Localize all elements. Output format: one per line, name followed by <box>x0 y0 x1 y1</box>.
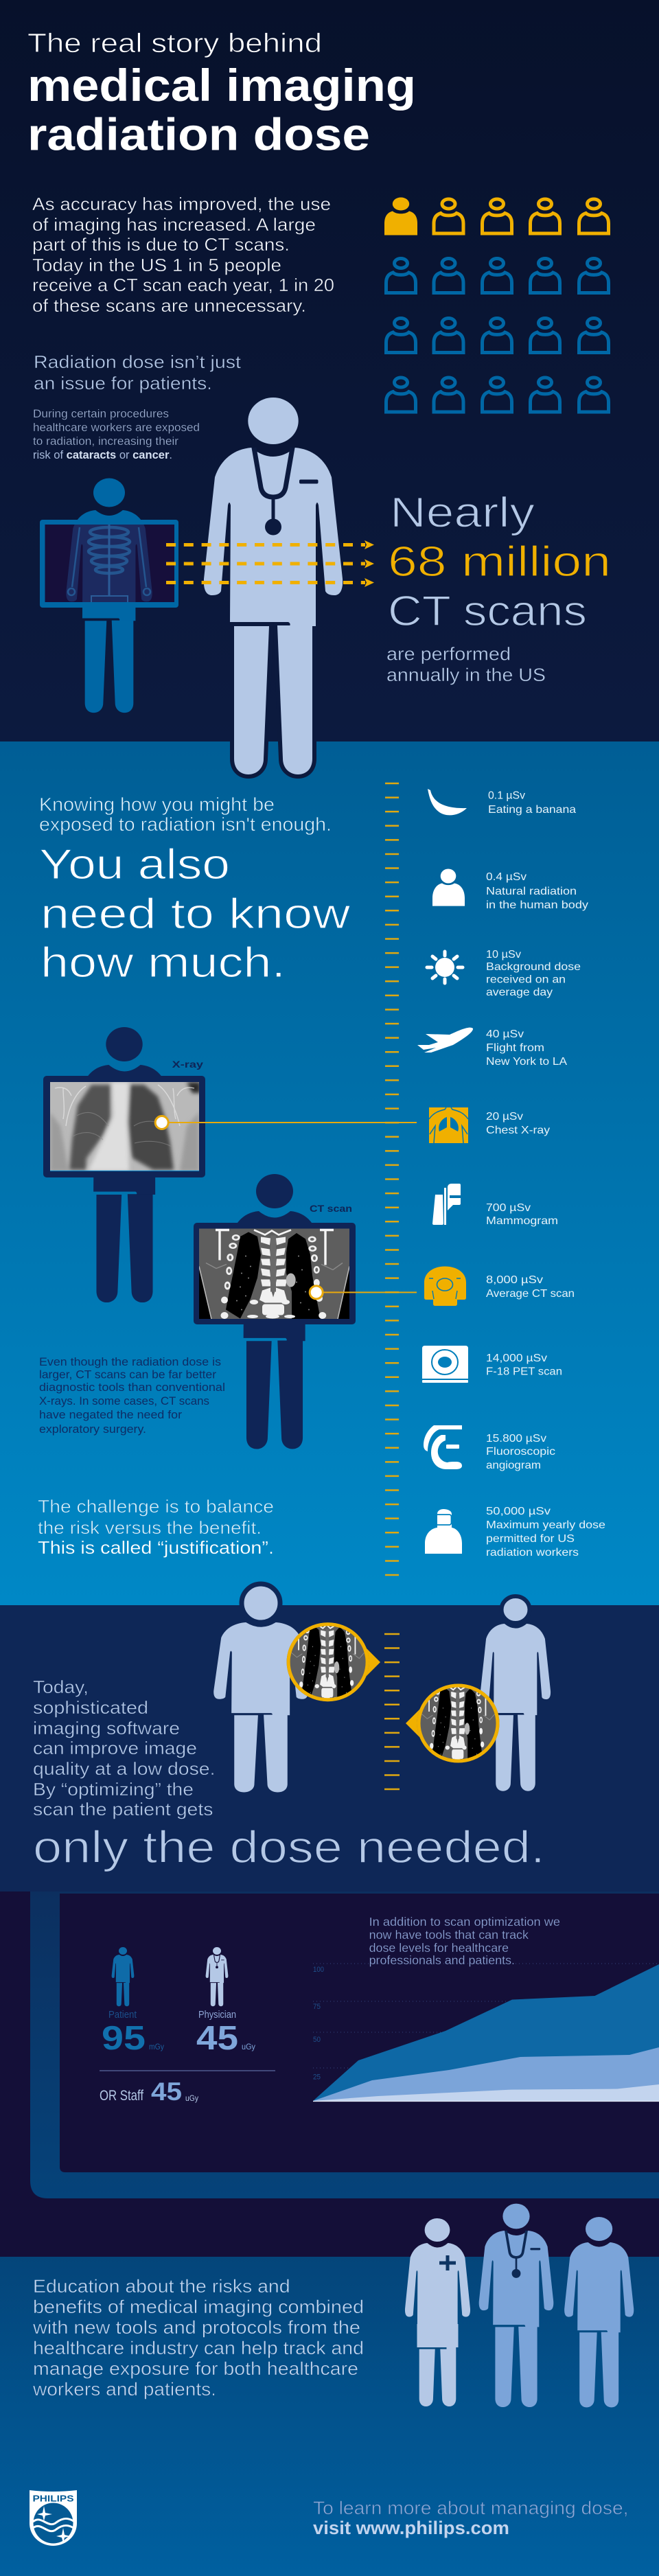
icon: banana <box>428 789 467 815</box>
subheading: not just patients: Radiation dose isn’t just <box>34 352 242 372</box>
stat: physician 45 uGy: Physician <box>198 2009 236 2021</box>
paragraph: CT vs X-ray: X-rays. In some cases, CT scans <box>39 1394 209 1407</box>
figure: staff <box>564 2217 634 2407</box>
section 3 background <box>0 1605 659 1894</box>
intro paragraph: of these scans are unnecessary. <box>32 295 306 316</box>
chart: dose over time: 25 <box>313 2073 321 2082</box>
monitor frame <box>30 1891 659 2198</box>
section 1 background <box>0 0 659 741</box>
small paragraph: healthcare workers: to radiation, increasing their <box>33 435 178 448</box>
label: 14,000 PET: F-18 PET scan <box>486 1366 562 1377</box>
paragraph: software <box>33 1677 216 1819</box>
section 2 background <box>0 741 659 1605</box>
label: 8,000 CT <box>486 1274 575 1300</box>
small paragraph: healthcare workers <box>33 407 200 461</box>
stat: physician 45 uGy: uGy <box>242 2042 255 2051</box>
section 4 background <box>0 1891 659 2257</box>
label: 0.4 natural radiation: in the human body <box>486 899 588 911</box>
label: 0.4 natural radiation <box>486 871 588 911</box>
label: 50,000 yearly maximum: 50,000 µSv <box>486 1506 551 1517</box>
text: dose tracking tools: professionals and patients. <box>369 1953 515 1967</box>
stat: physician 45 uGy: 45 <box>196 2020 238 2057</box>
stat: patient 95 mGy <box>102 2009 164 2057</box>
text: justification: the risk versus the benefit. <box>38 1517 262 1538</box>
figure: small patient <box>481 1596 551 1791</box>
call to action: To learn more about managing dose, <box>313 2498 629 2518</box>
paragraph: education: Education about the risks and <box>33 2276 290 2297</box>
label: 10 background: received on an <box>486 974 566 985</box>
stat: OR staff 45 uGy <box>100 2078 198 2106</box>
figure: large patient <box>213 1584 308 1793</box>
dose ruler <box>385 783 399 1576</box>
call to action: visit www.philips.com <box>313 2518 509 2538</box>
label: CT scan: CT scan <box>310 1203 352 1214</box>
text: justification: The challenge is to balance <box>38 1496 274 1517</box>
dose ruler: mini <box>384 1633 400 1791</box>
stat: OR staff 45 uGy: 45 <box>151 2078 182 2106</box>
intro paragraph: part of this is due to CT scans. <box>32 234 290 255</box>
heading: need to know <box>41 890 350 938</box>
icon: patient <box>112 1947 134 2006</box>
heading: only the dose needed: only the dose needed. <box>33 1821 545 1872</box>
label: 700 mammogram: Mammogram <box>486 1215 558 1227</box>
panel: optimization <box>33 1584 551 1872</box>
intro lines: exposed to radiation isn't enough. <box>39 814 332 835</box>
label: 40 flight: 40 µSv <box>486 1028 524 1040</box>
label: 50,000 yearly maximum: Maximum yearly dose <box>486 1519 605 1531</box>
chart: dose over time: 50 <box>313 2036 321 2044</box>
chart: dose over time: 75 <box>313 2003 321 2011</box>
label: 40 flight <box>486 1028 567 1068</box>
text: dose tracking tools: now have tools that can track <box>369 1928 529 1942</box>
paragraph: software: Today, <box>33 1677 89 1697</box>
small paragraph: healthcare workers: healthcare workers are exposed <box>33 421 200 434</box>
paragraph: CT vs X-ray: Even though the radiation dose is <box>39 1355 221 1368</box>
icon: chest x-ray <box>429 1107 468 1143</box>
label: 40 flight: Flight from <box>486 1042 544 1054</box>
label: 15,800 fluoroscopic: Fluoroscopic <box>486 1446 555 1458</box>
panel: intro <box>27 29 611 774</box>
paragraph: education: workers and patients. <box>32 2379 216 2400</box>
figure: nurse <box>405 2218 470 2406</box>
paragraph: CT vs X-ray: larger, CT scans can be far better <box>39 1368 216 1381</box>
icon: person <box>432 869 465 906</box>
label: 0.1 banana <box>488 790 576 816</box>
title <box>27 29 416 159</box>
paragraph: education: benefits of medical imaging combined <box>33 2297 364 2317</box>
panel: education <box>30 2204 634 2546</box>
paragraph: education: with new tools and protocols from the <box>32 2317 360 2338</box>
stat: OR staff 45 uGy: uGy <box>185 2093 198 2103</box>
paragraph: education: healthcare industry can help track and <box>33 2338 364 2358</box>
intro lines <box>39 794 332 835</box>
text: dose tracking tools: dose levels for healthcare <box>369 1941 509 1955</box>
divider <box>100 2070 275 2071</box>
text: justification <box>38 1496 274 1558</box>
arrows: radiation scatter <box>166 540 374 587</box>
label: 10 background: 10 µSv <box>486 949 521 961</box>
paragraph: software: can improve image <box>33 1738 197 1758</box>
label: 15,800 fluoroscopic: angiogram <box>486 1460 541 1471</box>
figure: x-ray person <box>43 1027 205 1302</box>
intro paragraph: of imaging has increased. A large <box>32 214 316 235</box>
call to action <box>313 2498 629 2538</box>
icon: physician <box>206 1947 228 2006</box>
monitor screen <box>60 1894 659 2172</box>
bubble: standard dose scan <box>287 1622 380 1701</box>
heading: how much. <box>41 939 286 987</box>
paragraph: CT vs X-ray: diagnostic tools than conventional <box>39 1381 225 1394</box>
title: medical imaging <box>27 60 416 111</box>
text: justification: This is called “justification”. <box>38 1537 274 1558</box>
label: 20 chest x-ray <box>486 1111 550 1136</box>
label: 50,000 yearly maximum: permitted for US <box>486 1533 575 1545</box>
icon: C-arm <box>424 1425 462 1469</box>
label: 20 chest x-ray: Chest X-ray <box>486 1125 550 1136</box>
stat: OR staff 45 uGy: OR Staff <box>100 2088 143 2104</box>
label: 15,800 fluoroscopic: 15.800 µSv <box>486 1433 546 1445</box>
subheading: not just patients: an issue for patients. <box>34 373 212 393</box>
label: 15,800 fluoroscopic <box>486 1433 555 1471</box>
heading <box>39 841 350 987</box>
paragraph: software: sophisticated <box>33 1697 148 1718</box>
stat: 68 million CT scans: are performed <box>386 644 511 665</box>
intro lines: Knowing how you might be <box>39 794 275 815</box>
title: The real story behind <box>27 29 322 58</box>
panel: how much <box>38 783 605 1576</box>
label: 0.1 banana: 0.1 µSv <box>488 790 525 802</box>
text: dose tracking tools: In addition to scan optimization we <box>369 1915 560 1929</box>
label: 0.1 banana: Eating a banana <box>488 804 576 816</box>
paragraph: education <box>32 2276 364 2400</box>
paragraph: education: manage exposure for both healthcare <box>33 2358 358 2379</box>
stat: 68 million CT scans: CT scans <box>388 588 587 635</box>
icon: sun <box>427 952 463 983</box>
icon grid: 1 in 20 people <box>384 198 608 412</box>
paragraph: software: scan the patient gets <box>33 1799 213 1819</box>
icon: plane <box>417 1028 473 1053</box>
label: 0.4 natural radiation: 0.4 µSv <box>486 871 527 883</box>
title: radiation dose <box>27 108 370 159</box>
text: dose tracking tools <box>369 1915 560 1967</box>
chart: dose over time: 100 <box>313 1966 324 1974</box>
label: 14,000 PET <box>486 1353 562 1377</box>
label: 700 mammogram: 700 µSv <box>486 1202 531 1214</box>
logo: Philips shield <box>30 2490 77 2546</box>
dose scale entries <box>417 789 605 1559</box>
intro paragraph <box>32 194 334 316</box>
connector: x-ray to scale <box>155 1116 417 1129</box>
label: 8,000 CT: 8,000 µSv <box>486 1274 543 1286</box>
chart: dose over time <box>313 1964 659 2101</box>
stat: 68 million CT scans: 68 million <box>388 538 611 586</box>
label: 10 background <box>486 949 581 998</box>
label: 14,000 PET: 14,000 µSv <box>486 1353 547 1364</box>
paragraph: software: quality at a low dose. <box>33 1758 216 1779</box>
icon: CT scanner <box>424 1266 466 1306</box>
icon: mammogram <box>432 1184 461 1225</box>
intro paragraph: As accuracy has improved, the use <box>32 194 331 214</box>
label: x-ray: X-ray <box>172 1059 203 1070</box>
heading: You also <box>39 841 230 888</box>
paragraph: CT vs X-ray <box>39 1355 225 1436</box>
logo: Philips shield: PHILIPS <box>33 2494 74 2503</box>
small paragraph: healthcare workers: During certain procedures <box>33 407 169 420</box>
connector: CT to scale <box>310 1286 417 1299</box>
paragraph: software: By “optimizing” the <box>33 1779 194 1799</box>
chest x-ray image <box>50 1082 200 1171</box>
figure: physician <box>479 2204 553 2407</box>
figure: patient with x-ray frame <box>40 478 178 713</box>
CT image <box>199 1229 349 1319</box>
stat: physician 45 uGy <box>196 2009 255 2057</box>
paragraph: CT vs X-ray: have negated the need for <box>39 1408 182 1421</box>
label: 40 flight: New York to LA <box>486 1056 567 1068</box>
small paragraph: healthcare workers: risk of cataracts or cancer. <box>33 448 172 461</box>
stat: 68 million CT scans: annually in the US <box>386 665 546 685</box>
intro paragraph: receive a CT scan each year, 1 in 20 <box>32 275 334 295</box>
label: 10 background: Background dose <box>486 961 581 973</box>
panel: dose tracking monitor <box>30 1891 659 2198</box>
label: 8,000 CT: Average CT scan <box>486 1288 575 1300</box>
figure: CT person <box>194 1174 356 1449</box>
stat: 68 million CT scans <box>386 489 611 685</box>
paragraph: software: imaging software <box>33 1718 180 1738</box>
label: 700 mammogram <box>486 1202 558 1227</box>
stat: patient 95 mGy: 95 <box>102 2020 146 2057</box>
label: 0.4 natural radiation: Natural radiation <box>486 886 577 897</box>
stat: patient 95 mGy: Patient <box>108 2009 137 2021</box>
intro paragraph: Today in the US 1 in 5 people <box>32 255 281 275</box>
stat: patient 95 mGy: mGy <box>149 2042 164 2051</box>
label: 10 background: average day <box>486 987 553 998</box>
label: 20 chest x-ray: 20 µSv <box>486 1111 523 1123</box>
icon: radiation worker <box>425 1509 462 1554</box>
subheading: not just patients <box>34 352 242 393</box>
paragraph: CT vs X-ray: exploratory surgery. <box>39 1423 146 1436</box>
label: 50,000 yearly maximum: radiation workers <box>486 1547 579 1559</box>
icon: PET scanner <box>422 1346 468 1383</box>
figure: doctor <box>204 398 343 774</box>
bubble: low dose scan <box>406 1683 500 1763</box>
label: 50,000 yearly maximum <box>486 1506 605 1559</box>
stat: 68 million CT scans: Nearly <box>390 489 535 537</box>
section 5 background <box>0 2257 659 2576</box>
